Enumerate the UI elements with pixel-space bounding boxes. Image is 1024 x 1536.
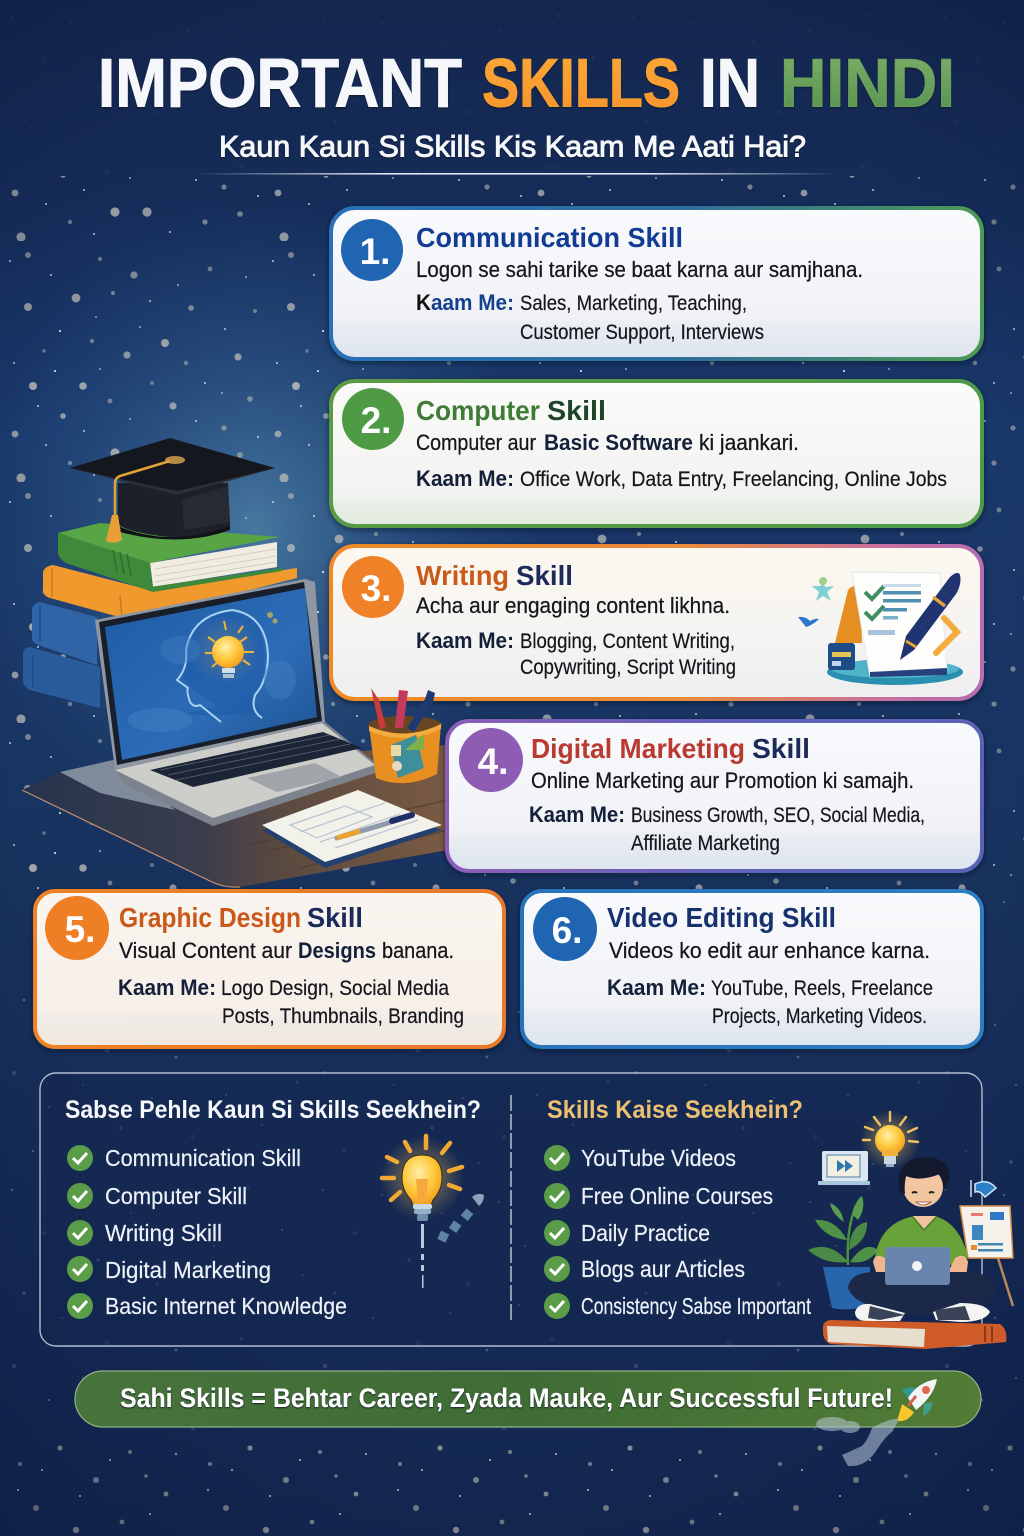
- card 4: digital marketing skill: Affiliate Marketing: [631, 832, 780, 855]
- card 1: communication skill: Customer Support, Interviews: [520, 321, 764, 344]
- title: HINDI: [780, 44, 955, 122]
- card 6: video editing skill: YouTube, Reels, Freelance: [711, 977, 933, 1000]
- panel: what to learn first and how to learn: [40, 1073, 1013, 1349]
- orange book: [43, 565, 297, 620]
- badge 3: 3.: [361, 568, 391, 609]
- badge 1: 1.: [360, 231, 390, 272]
- card 5: graphic design skill: Kaam Me:: [118, 975, 216, 1000]
- laptop: [60, 579, 378, 826]
- card 2: computer skill: ki jaankari.: [699, 430, 799, 455]
- badge 2: [342, 388, 404, 450]
- title: IN: [700, 44, 760, 122]
- card 5: graphic design skill: Graphic Design: [119, 902, 301, 933]
- list: first skills: [67, 1145, 347, 1319]
- badge 2: 2.: [361, 400, 391, 441]
- heading: which skills first: Sabse Pehle Kaun Si Skills Seekhein?: [65, 1096, 481, 1124]
- notebook: [262, 790, 442, 868]
- title: SKILLS: [482, 44, 680, 122]
- card 5: graphic design skill: Designs: [298, 938, 376, 963]
- card 6: video editing skill: Projects, Marketing Videos.: [712, 1005, 927, 1028]
- card 5: graphic design skill: [35, 891, 504, 1047]
- blue books: [23, 602, 100, 708]
- list: first skills: Writing Skill: [105, 1220, 222, 1246]
- card 4: digital marketing skill: Business Growth, SEO, Social Media,: [631, 804, 925, 827]
- card 4: digital marketing skill: Kaam Me:: [529, 802, 625, 827]
- card 3: writing skill: Writing: [416, 560, 509, 591]
- card 5: graphic design skill: Posts, Thumbnails, Branding: [222, 1005, 464, 1028]
- card 4: digital marketing skill: Online Marketing aur Promotion ki samajh.: [531, 768, 914, 793]
- illustration: student on a book with laptop: [808, 1110, 1013, 1349]
- card 6: video editing skill: Video Editing Skill: [607, 902, 836, 933]
- title: [98, 44, 955, 122]
- list: how to learn: [544, 1145, 811, 1319]
- heading: how to learn: Skills Kaise Seekhein?: [547, 1096, 803, 1124]
- graduation cap: [70, 438, 275, 543]
- plant: [808, 1196, 878, 1309]
- pen cup: [368, 688, 442, 783]
- banner: closing message: [75, 1371, 981, 1466]
- card 2: computer skill: Skill: [547, 395, 606, 426]
- card 3: writing skill: Skill: [516, 560, 573, 591]
- list: first skills: Digital Marketing: [105, 1257, 271, 1283]
- icon: light bulb: [380, 1136, 484, 1288]
- idea bulb: [860, 1110, 920, 1170]
- card 2: computer skill: Computer: [416, 395, 540, 426]
- badge 4: 4.: [478, 741, 508, 782]
- card 4: digital marketing skill: Digital Marketing: [531, 733, 745, 764]
- card 4: digital marketing skill: Skill: [752, 733, 810, 764]
- card 2: computer skill: [331, 381, 982, 526]
- laptop screen: head with light bulb: [128, 610, 296, 732]
- badge 6: 6.: [552, 910, 582, 951]
- card 6: video editing skill: [522, 891, 982, 1047]
- badge 3: [342, 556, 404, 618]
- list: how to learn: Consistency Sabse Important: [581, 1293, 811, 1319]
- card 5: graphic design skill: Visual Content aur: [119, 938, 292, 963]
- icon: checklist and pen: [798, 572, 963, 685]
- video screen: [818, 1151, 870, 1185]
- card 5: graphic design skill: Logo Design, Social Media: [221, 977, 449, 1000]
- badge 4: [459, 728, 523, 792]
- card 2: computer skill: Kaam Me:: [416, 466, 514, 491]
- card 2: computer skill: Office Work, Data Entry, Freelancing, Online Jobs: [520, 468, 947, 491]
- title: IMPORTANT: [98, 44, 462, 122]
- card 3: writing skill: Blogging, Content Writing,: [520, 630, 735, 653]
- flag: [971, 1180, 996, 1197]
- card 4: digital marketing skill: [447, 721, 982, 871]
- card 1: communication skill: Communication Skill: [416, 222, 683, 253]
- list: how to learn: YouTube Videos: [581, 1145, 736, 1171]
- card 6: video editing skill: Videos ko edit aur enhance karna.: [609, 938, 930, 963]
- card 5: graphic design skill: banana.: [382, 938, 454, 963]
- list: first skills: Communication Skill: [105, 1145, 301, 1171]
- list: how to learn: Daily Practice: [581, 1220, 710, 1246]
- student figure: [848, 1157, 995, 1322]
- subtitle: Kaun Kaun Si Skills Kis Kaam Me Aati Hai?: [219, 130, 806, 164]
- green book: [58, 523, 282, 592]
- list: how to learn: Free Online Courses: [581, 1183, 773, 1209]
- banner: closing message: Sahi Skills = Behtar Career, Zyada Mauke, Aur Successful Future!: [120, 1383, 893, 1413]
- illustration: graduation cap, books, laptop and desk: [22, 438, 448, 887]
- card 1: communication skill: Logon se sahi tarike se baat karna aur samjhana.: [416, 257, 863, 282]
- list: first skills: Basic Internet Knowledge: [105, 1293, 347, 1319]
- orange book seat: [823, 1320, 1006, 1349]
- badge 1: [341, 219, 403, 281]
- badge 5: 5.: [65, 909, 95, 950]
- card 1: communication skill: [331, 208, 982, 359]
- desk: [22, 745, 448, 887]
- icon: rocket with smoke trail: [816, 1379, 937, 1466]
- badge 6: [533, 897, 597, 961]
- board on easel: [960, 1206, 1013, 1306]
- card 1: communication skill: Sales, Marketing, Teaching,: [520, 292, 747, 315]
- card 2: computer skill: Basic Software: [544, 430, 693, 455]
- badge 5: [45, 896, 109, 960]
- card 3: writing skill: Acha aur engaging content likhna.: [416, 593, 730, 618]
- card 3: writing skill: Kaam Me:: [416, 628, 514, 653]
- list: how to learn: Blogs aur Articles: [581, 1256, 745, 1282]
- card 6: video editing skill: Kaam Me:: [607, 975, 706, 1000]
- list: first skills: Computer Skill: [105, 1183, 247, 1209]
- card 2: computer skill: Computer aur: [416, 430, 536, 455]
- card 3: writing skill: [331, 546, 982, 699]
- card 1: communication skill: Kaam Me:: [416, 290, 514, 315]
- card 3: writing skill: Copywriting, Script Writing: [520, 656, 736, 679]
- card 5: graphic design skill: Skill: [307, 902, 363, 933]
